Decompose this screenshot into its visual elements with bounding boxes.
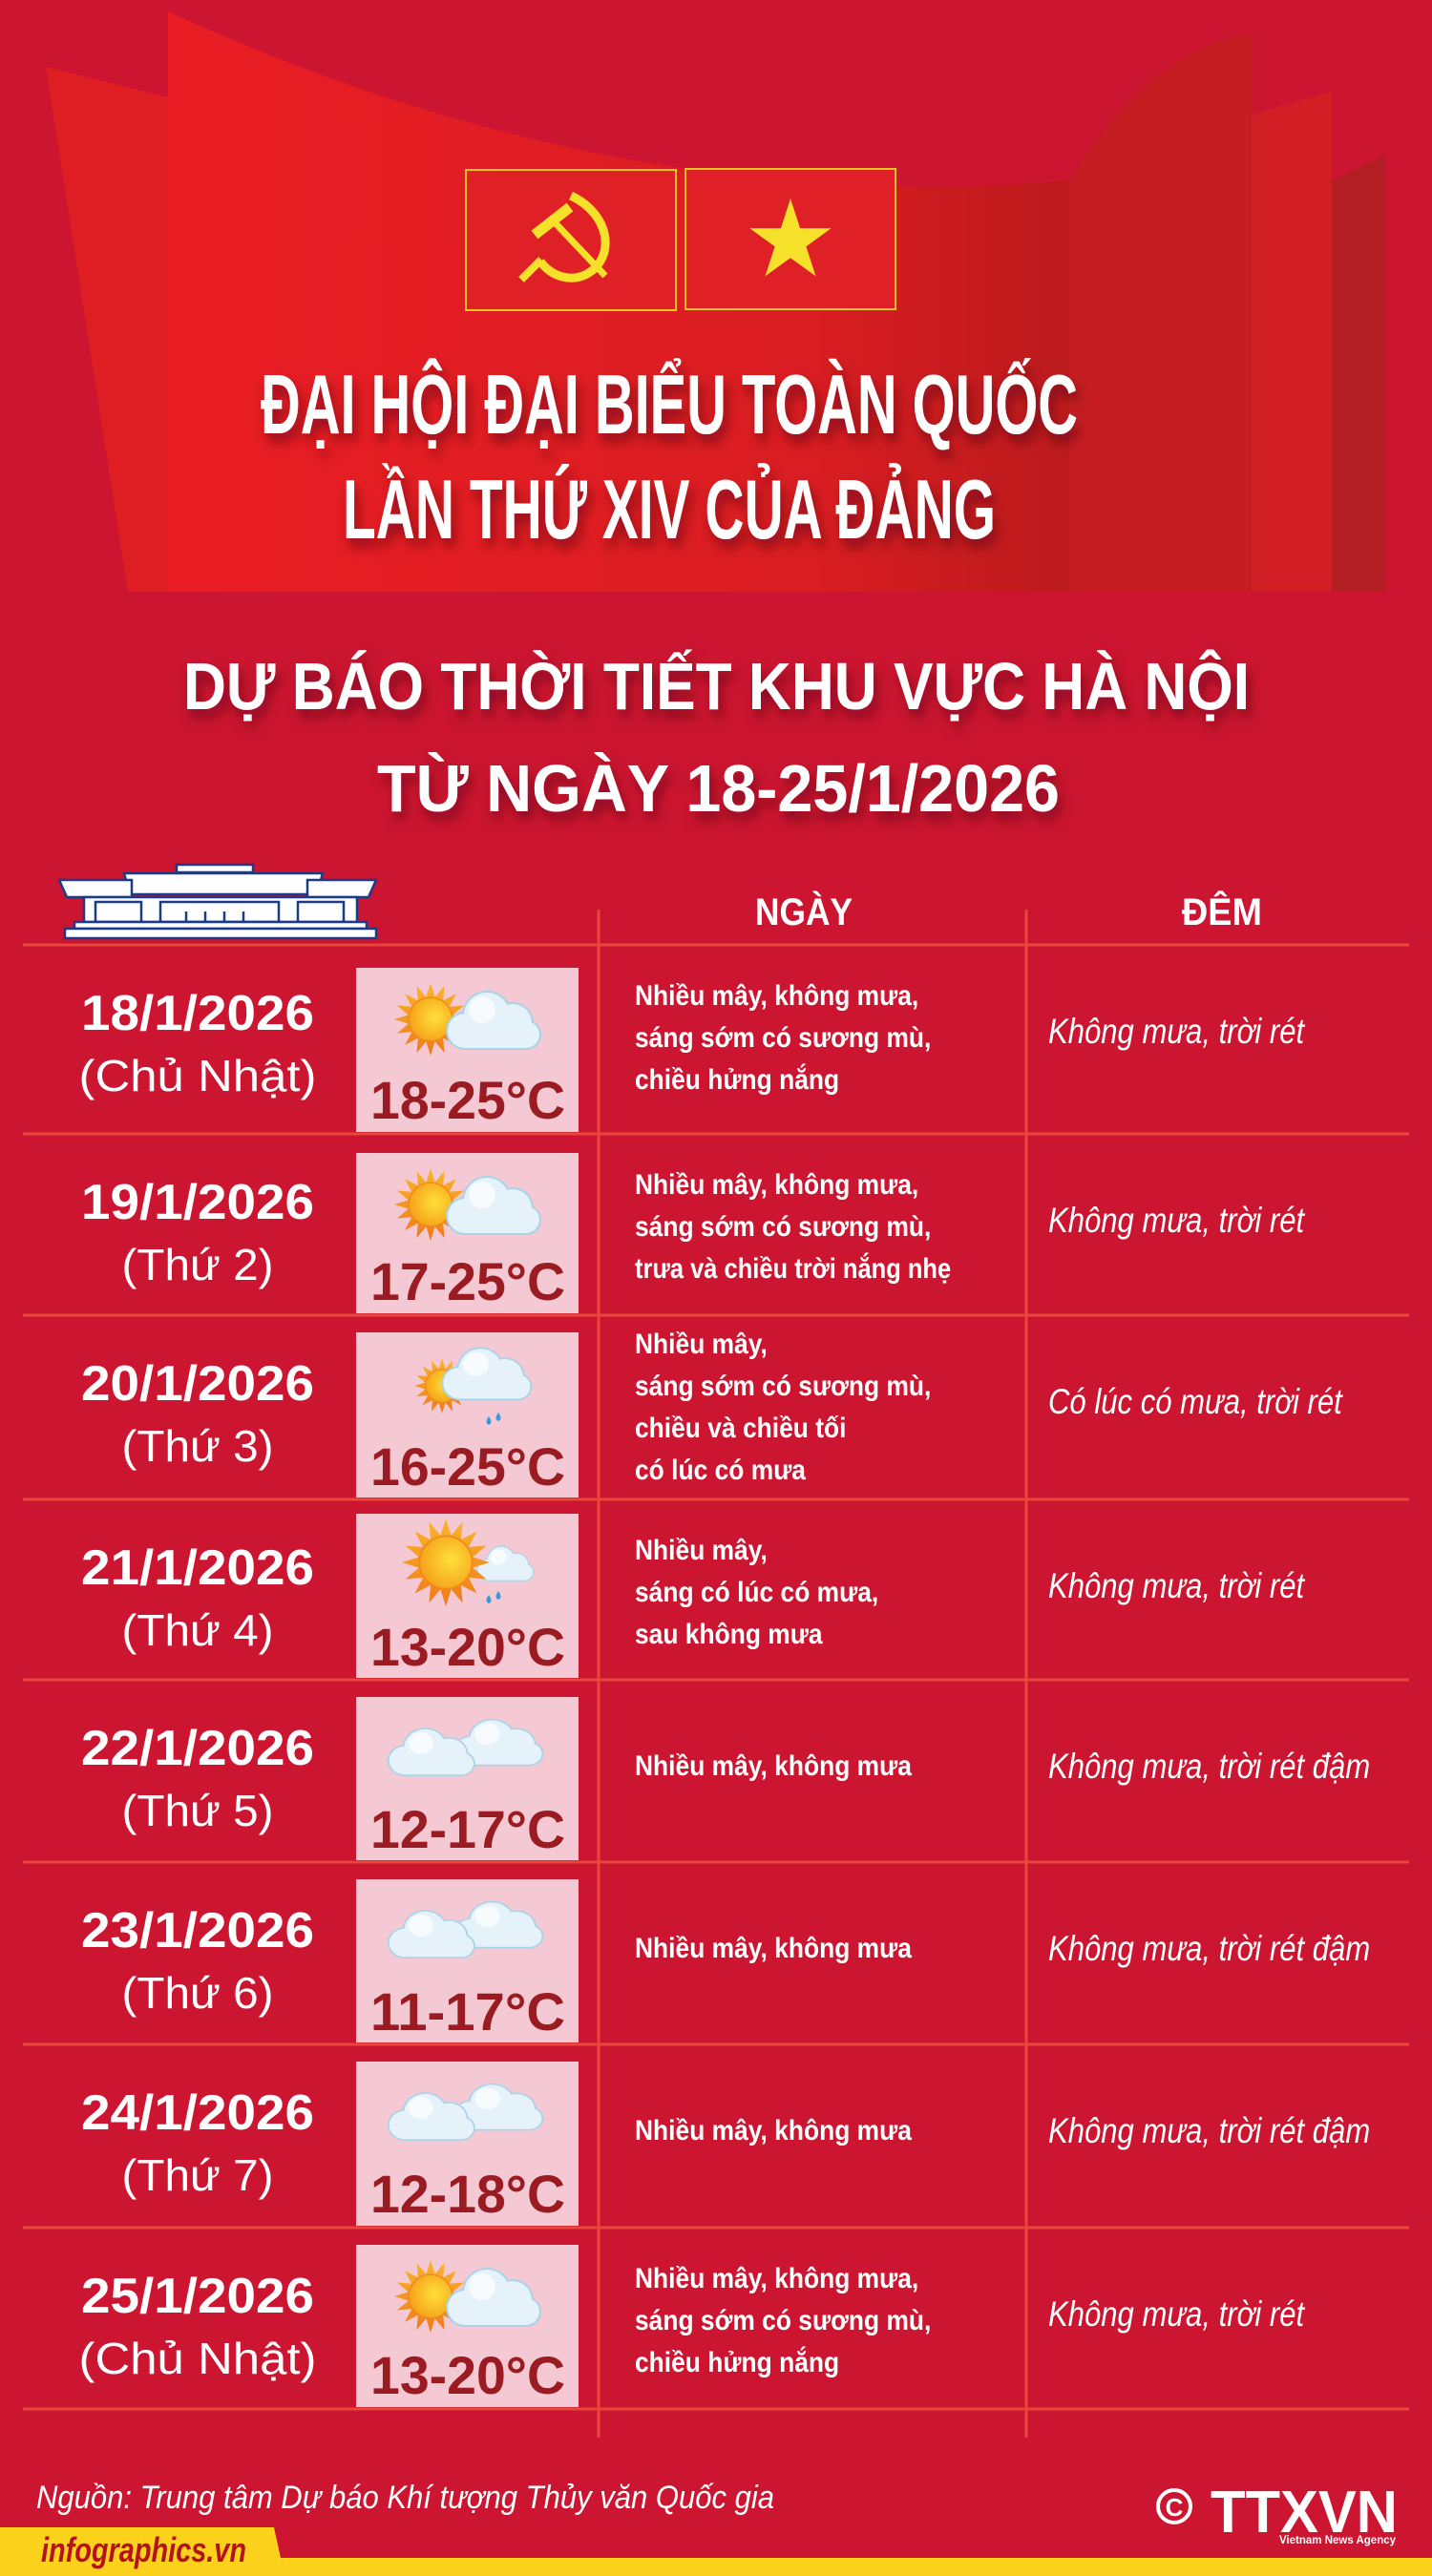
row: 24/1/2026 xyxy=(81,2062,1370,2226)
row: 21/1/2026: 21/1/2026 xyxy=(81,1540,314,1596)
row: 20/1/2026: sáng sớm có sương mù, xyxy=(635,1369,931,1401)
row: 18/1/2026: 18/1/2026 xyxy=(81,986,314,1041)
row: 25/1/2026: (Chủ Nhật) xyxy=(78,2334,317,2383)
row: 19/1/2026: 19/1/2026 xyxy=(81,1175,314,1230)
row: 19/1/2026: Không mưa, trời rét xyxy=(1048,1202,1306,1241)
row: 19/1/2026: sáng sớm có sương mù, xyxy=(635,1209,931,1242)
flag: star xyxy=(685,169,895,309)
row: 20/1/2026: có lúc có mưa xyxy=(635,1453,806,1485)
row: 22/1/2026: Không mưa, trời rét đậm xyxy=(1048,1748,1370,1787)
row: 18/1/2026: 18-25°C xyxy=(370,1070,565,1130)
row: 23/1/2026: Nhiều mây, không mưa xyxy=(635,1931,912,1963)
title: LẦN THỨ XIV CỦA ĐẢNG xyxy=(343,462,996,556)
row: 22/1/2026: Nhiều mây, không mưa xyxy=(635,1749,912,1781)
row: 22/1/2026: (Thứ 5) xyxy=(122,1786,273,1835)
row: 21/1/2026: sáng có lúc có mưa, xyxy=(635,1575,878,1607)
row: 19/1/2026: 17-25°C xyxy=(370,1251,565,1311)
table header: ĐÊM xyxy=(1182,890,1262,933)
row: 18/1/2026: Nhiều mây, không mưa, xyxy=(635,978,918,1011)
row: 24/1/2026: 12-18°C xyxy=(370,2164,565,2224)
row: 25/1/2026: sáng sớm có sương mù, xyxy=(635,2303,931,2335)
subtitle: TỪ NGÀY 18-25/1/2026 xyxy=(377,751,1060,826)
logo: TTXVN: TTXVN xyxy=(1211,2480,1398,2545)
row: 21/1/2026: 13-20°C xyxy=(370,1617,565,1677)
row: 25/1/2026: 13-20°C xyxy=(370,2345,565,2405)
row: 18/1/2026: sáng sớm có sương mù, xyxy=(635,1020,931,1053)
row: 21/1/2026: (Thứ 4) xyxy=(122,1605,273,1655)
row: 23/1/2026: (Thứ 6) xyxy=(122,1968,273,2018)
row: 21/1/2026 xyxy=(81,1514,1306,1678)
footer: yellow bar: infographics.vn xyxy=(41,2530,246,2569)
row: 22/1/2026: 22/1/2026 xyxy=(81,1721,314,1776)
row: 24/1/2026: (Thứ 7) xyxy=(122,2150,273,2200)
row: 24/1/2026: Nhiều mây, không mưa xyxy=(635,2113,912,2146)
subtitle: DỰ BÁO THỜI TIẾT KHU VỰC HÀ NỘI xyxy=(183,648,1250,723)
row: 21/1/2026: Nhiều mây, xyxy=(635,1533,768,1565)
row: 20/1/2026: 16-25°C xyxy=(370,1436,565,1497)
title xyxy=(261,357,1078,556)
banner: flag background xyxy=(0,0,1432,611)
row: 22/1/2026: 12-17°C xyxy=(370,1799,565,1859)
row: 24/1/2026: 24/1/2026 xyxy=(81,2085,314,2141)
row: 19/1/2026 xyxy=(81,1153,1306,1313)
row: 20/1/2026: (Thứ 3) xyxy=(122,1421,273,1471)
footer: yellow bar xyxy=(0,2527,1432,2576)
row: 22/1/2026 xyxy=(81,1697,1370,1860)
logo: TTXVN: C xyxy=(1166,2493,1184,2522)
row: 23/1/2026: Không mưa, trời rét đậm xyxy=(1048,1930,1370,1969)
row: 25/1/2026: Không mưa, trời rét xyxy=(1048,2295,1306,2335)
subtitle xyxy=(183,648,1250,826)
row: 25/1/2026: 25/1/2026 xyxy=(81,2269,314,2324)
row: 18/1/2026: chiều hửng nắng xyxy=(635,1062,839,1095)
row: 24/1/2026: Không mưa, trời rét đậm xyxy=(1048,2112,1370,2151)
row: 25/1/2026: Nhiều mây, không mưa, xyxy=(635,2261,918,2293)
row: 18/1/2026: Không mưa, trời rét xyxy=(1048,1013,1306,1052)
flag: party xyxy=(466,170,676,310)
row: 20/1/2026: Nhiều mây, xyxy=(635,1327,768,1359)
row: 21/1/2026: Không mưa, trời rét xyxy=(1048,1567,1306,1606)
row: 23/1/2026 xyxy=(81,1879,1370,2042)
row: 18/1/2026: (Chủ Nhật) xyxy=(78,1051,317,1100)
row: 18/1/2026 xyxy=(78,968,1306,1132)
table header: NGÀY xyxy=(755,890,853,933)
row: 23/1/2026: 11-17°C xyxy=(370,1981,565,2042)
row: 19/1/2026: trưa và chiều trời nắng nhẹ xyxy=(635,1252,951,1284)
row: 20/1/2026: 20/1/2026 xyxy=(81,1356,314,1412)
table header xyxy=(755,890,1262,933)
row: 21/1/2026: sau không mưa xyxy=(635,1617,823,1649)
row: 25/1/2026 xyxy=(78,2245,1306,2407)
row: 19/1/2026: (Thứ 2) xyxy=(122,1240,273,1289)
icon: building xyxy=(59,865,376,938)
row: 20/1/2026: Có lúc có mưa, trời rét xyxy=(1048,1383,1343,1422)
row: 19/1/2026: Nhiều mây, không mưa, xyxy=(635,1167,918,1200)
row: 25/1/2026: chiều hửng nắng xyxy=(635,2345,839,2377)
logo: TTXVN: Vietnam News Agency xyxy=(1279,2533,1396,2546)
source note: Nguồn: Trung tâm Dự báo Khí tượng Thủy văn Quốc gia xyxy=(36,2480,774,2516)
row: 20/1/2026 xyxy=(81,1327,1343,1497)
row: 20/1/2026: chiều và chiều tối xyxy=(635,1411,846,1443)
row: 23/1/2026: 23/1/2026 xyxy=(81,1903,314,1958)
